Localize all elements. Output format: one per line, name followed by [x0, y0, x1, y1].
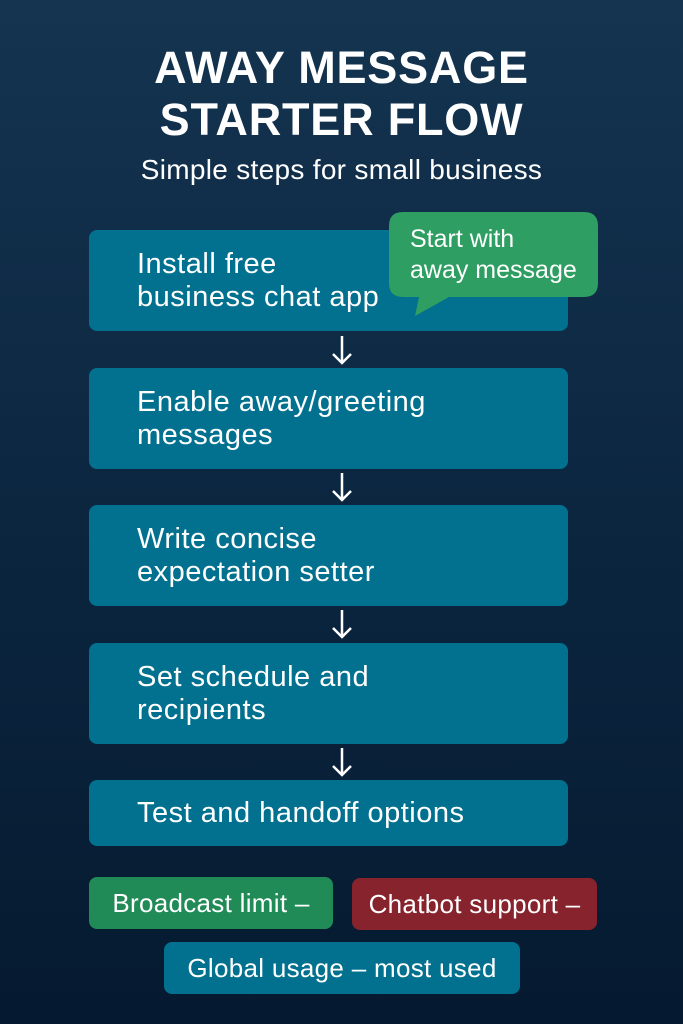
step 3	[89, 505, 568, 606]
step 1: Install free	[137, 248, 277, 280]
arrow 4	[332, 748, 352, 777]
step 2: messages	[137, 418, 273, 450]
step 1: business chat app	[137, 280, 379, 312]
tag: broadcast limit	[89, 877, 333, 929]
title	[154, 42, 529, 145]
arrow 1	[332, 336, 352, 365]
step 2: Enable away/greeting	[137, 386, 426, 418]
step 3: expectation setter	[137, 556, 375, 588]
tag: chatbot support: Chatbot support –	[369, 888, 580, 918]
step 2	[89, 368, 568, 469]
step 3: Write concise	[137, 522, 317, 554]
step 5: Test and handoff options	[137, 796, 464, 828]
title: STARTER FLOW	[160, 94, 523, 145]
step 5	[89, 780, 568, 846]
callout: start with away message: away message	[410, 256, 577, 284]
subtitle: Simple steps for small business	[141, 154, 542, 185]
title: AWAY MESSAGE	[154, 42, 529, 93]
callout: start with away message: Start with	[410, 225, 514, 253]
tag: global usage: Global usage – most used	[187, 952, 497, 982]
step 4: Set schedule and	[137, 660, 369, 692]
callout: start with away message	[389, 212, 598, 316]
arrow 2	[332, 473, 352, 502]
tag: global usage	[164, 942, 520, 994]
step 4: recipients	[137, 694, 266, 726]
step 1	[89, 230, 568, 331]
step 4	[89, 643, 568, 744]
arrow 3	[332, 610, 352, 639]
tag: chatbot support	[352, 878, 597, 930]
tag: broadcast limit: Broadcast limit –	[112, 888, 310, 918]
